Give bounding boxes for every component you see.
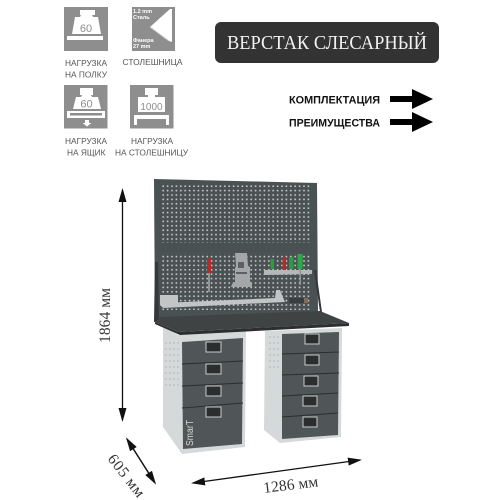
label: drawer load: НА ЯЩИК (67, 148, 106, 158)
icon: tabletop: Фанера (133, 38, 154, 44)
pegboard back panel (154, 179, 321, 322)
red screwdriver (207, 258, 211, 292)
dimension: depth (104, 439, 155, 500)
right pedestal (264, 328, 342, 443)
icon: tabletop: 27 mm (133, 44, 151, 50)
link: equipment with arrow: КОМПЛЕКТАЦИЯ (289, 94, 380, 106)
dimension: depth: 605 мм (104, 451, 148, 500)
icon: drawer load 60 (64, 85, 108, 128)
icon: shelf load 60 (64, 7, 108, 51)
icon: tabletop (132, 7, 175, 51)
left pedestal (163, 326, 246, 454)
tabletop (155, 311, 349, 335)
icon: tabletop: Сталь (133, 15, 150, 21)
tool holder (231, 253, 252, 287)
small dark tray (289, 298, 308, 303)
small tool shelf (264, 254, 312, 285)
icon: drawer load 60: 60 (80, 98, 93, 110)
link: advantages with arrow: ПРЕИМУЩЕСТВА (289, 118, 380, 130)
dimension: width: 1286 мм (262, 473, 319, 497)
left pedestal: SmarT (185, 420, 196, 446)
dimension: height: 1864 мм (97, 288, 114, 343)
label: tabletop load: НА СТОЛЕШНИЦУ (115, 148, 189, 158)
label: tabletop load: НАГРУЗКА (131, 136, 173, 146)
icon: tabletop load 1000: 1000 (140, 102, 163, 113)
link: advantages with arrow (289, 112, 433, 132)
label: shelf load: НА ПОЛКУ (65, 70, 108, 80)
title (215, 22, 439, 63)
label: drawer load: НАГРУЗКА (65, 136, 107, 146)
icon: tabletop load 1000 (130, 85, 174, 128)
workbench (154, 179, 349, 454)
long lower shelf (160, 290, 285, 308)
label: tabletop: СТОЛЕШНИЦА (122, 57, 183, 67)
title: ВЕРСТАК СЛЕСАРНЫЙ (227, 31, 427, 54)
dimension: width (193, 460, 360, 497)
label: shelf load: НАГРУЗКА (65, 58, 107, 68)
icon: shelf load 60: 60 (80, 23, 92, 35)
link: equipment with arrow (289, 89, 433, 109)
icon: tabletop: 1.2 mm (133, 9, 152, 15)
